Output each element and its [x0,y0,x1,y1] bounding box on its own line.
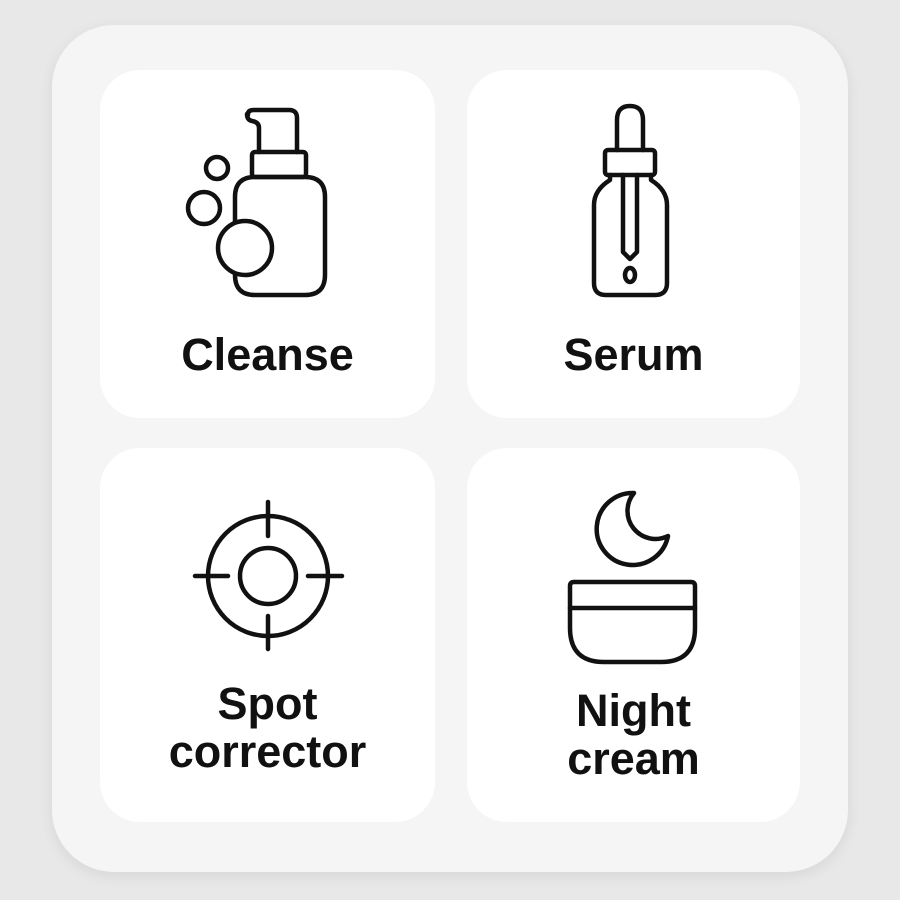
icon: moon and cream jar [570,493,695,662]
panel: cleanse card [100,70,435,418]
text: Spot corrector: Spot [218,678,317,729]
icon: dropper bottle [594,106,667,295]
icon: target [195,502,342,649]
text: Night cream [567,685,700,784]
text: Cleanse: Cleanse [181,329,354,380]
icon: pump bottle with bubbles [188,110,325,295]
text: Night cream: Night [576,685,691,736]
panel: night cream card [467,448,800,822]
text: Spot corrector: corrector [169,726,366,777]
panel: serum card [467,70,800,418]
panel: spot corrector card [100,448,435,822]
text: Spot corrector [169,678,366,777]
text: Night cream: cream [567,733,700,784]
text: Serum: Serum [563,329,704,380]
